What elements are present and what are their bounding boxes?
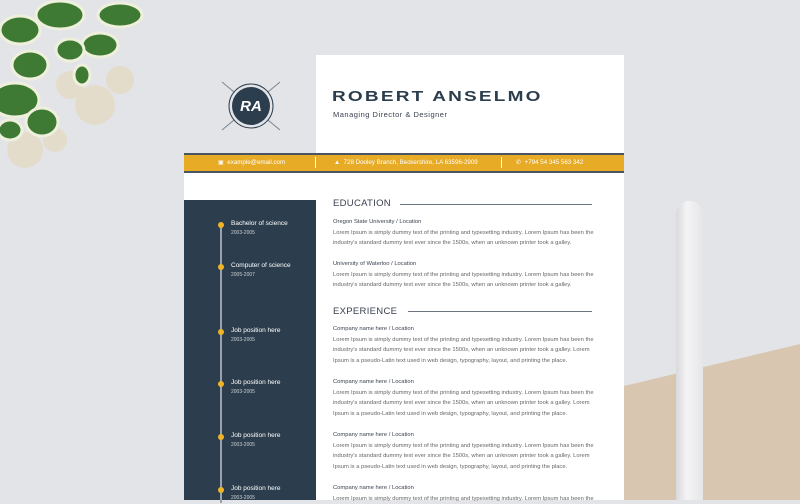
text: Company name here / Location bbox=[333, 485, 414, 491]
sidebar: 2003-2005 bbox=[231, 230, 255, 236]
sidebar: 2003-2005 bbox=[231, 442, 255, 448]
text: Company name here / Location bbox=[333, 432, 414, 438]
text: Lorem Ipsum is simply dummy text of the printing and typesetting industry. Lorem Ipsum has been the bbox=[333, 442, 594, 448]
experience heading: EXPERIENCE bbox=[333, 306, 397, 317]
text: industry's standard dummy text ever since the 1500s, when an unknown printer took a galley. Lorem bbox=[333, 400, 590, 406]
experience entries bbox=[333, 326, 594, 364]
name: ROBERT ANSELMO bbox=[332, 88, 543, 105]
contact bar bbox=[184, 153, 624, 173]
paper body bbox=[184, 173, 624, 500]
sidebar: Job position here bbox=[231, 485, 281, 492]
sidebar: Job position here bbox=[231, 327, 281, 334]
sidebar: 2005-2007 bbox=[231, 272, 255, 278]
education heading: EDUCATION bbox=[333, 198, 391, 209]
contact bar: ✆ +794 54 345 563 342 bbox=[516, 159, 583, 166]
sidebar: 2003-2005 bbox=[231, 337, 255, 343]
text: Lorem Ipsum is simply dummy text of the printing and typesetting industry. Lorem Ipsum has been the bbox=[333, 272, 594, 278]
text: University of Waterloo / Location bbox=[333, 261, 416, 267]
education entries: Lorem Ipsum is simply dummy text of the printing and typesetting industry. Lorem Ipsum has been the bbox=[333, 230, 594, 236]
sidebar: 2003-2005 bbox=[231, 495, 255, 501]
text: Company name here / Location bbox=[333, 379, 414, 385]
sidebar: Job position here bbox=[231, 432, 281, 439]
sidebar: Computer of science bbox=[231, 262, 291, 269]
sidebar: Bachelor of science bbox=[231, 220, 288, 227]
experience entries: Company name here / Location bbox=[333, 326, 414, 332]
plant bbox=[0, 0, 144, 168]
logo bbox=[222, 82, 280, 130]
education entries bbox=[333, 219, 594, 246]
text: Ipsum is a pseudo-Latin text used in web design, typography, layout, and printing the place. bbox=[333, 464, 567, 470]
header white panel bbox=[316, 55, 624, 153]
logo: RA bbox=[240, 98, 262, 115]
pencil bbox=[676, 201, 703, 500]
text: industry's standard dummy text ever since the 1500s, when an unknown printer took a galley. bbox=[333, 282, 571, 288]
sidebar: 2003-2005 bbox=[231, 389, 255, 395]
experience entries: Lorem Ipsum is simply dummy text of the printing and typesetting industry. Lorem Ipsum has been the bbox=[333, 336, 594, 342]
experience entries: industry's standard dummy text ever since the 1500s, when an unknown printer took a galley. Lorem bbox=[333, 347, 590, 353]
text: Lorem Ipsum is simply dummy text of the printing and typesetting industry. Lorem Ipsum has been the bbox=[333, 496, 594, 502]
text: Ipsum is a pseudo-Latin text used in web design, typography, layout, and printing the place. bbox=[333, 410, 567, 416]
sidebar bbox=[184, 200, 316, 500]
text: Lorem Ipsum is simply dummy text of the printing and typesetting industry. Lorem Ipsum has been the bbox=[333, 390, 594, 396]
education entries: Oregon State University / Location bbox=[333, 219, 421, 225]
contact bar: ▲ 728 Dooley Branch, Beckershire, LA 63596-2909 bbox=[334, 159, 478, 166]
education entries: industry's standard dummy text ever since the 1500s, when an unknown printer took a galley. bbox=[333, 240, 571, 246]
text: industry's standard dummy text ever since the 1500s, when an unknown printer took a galley. Lorem bbox=[333, 453, 590, 459]
contact bar: ▣ example@email.com bbox=[218, 159, 285, 166]
subtitle: Managing Director & Designer bbox=[333, 110, 447, 119]
experience entries: Ipsum is a pseudo-Latin text used in web design, typography, layout, and printing the place. bbox=[333, 358, 567, 364]
sidebar: Job position here bbox=[231, 379, 281, 386]
